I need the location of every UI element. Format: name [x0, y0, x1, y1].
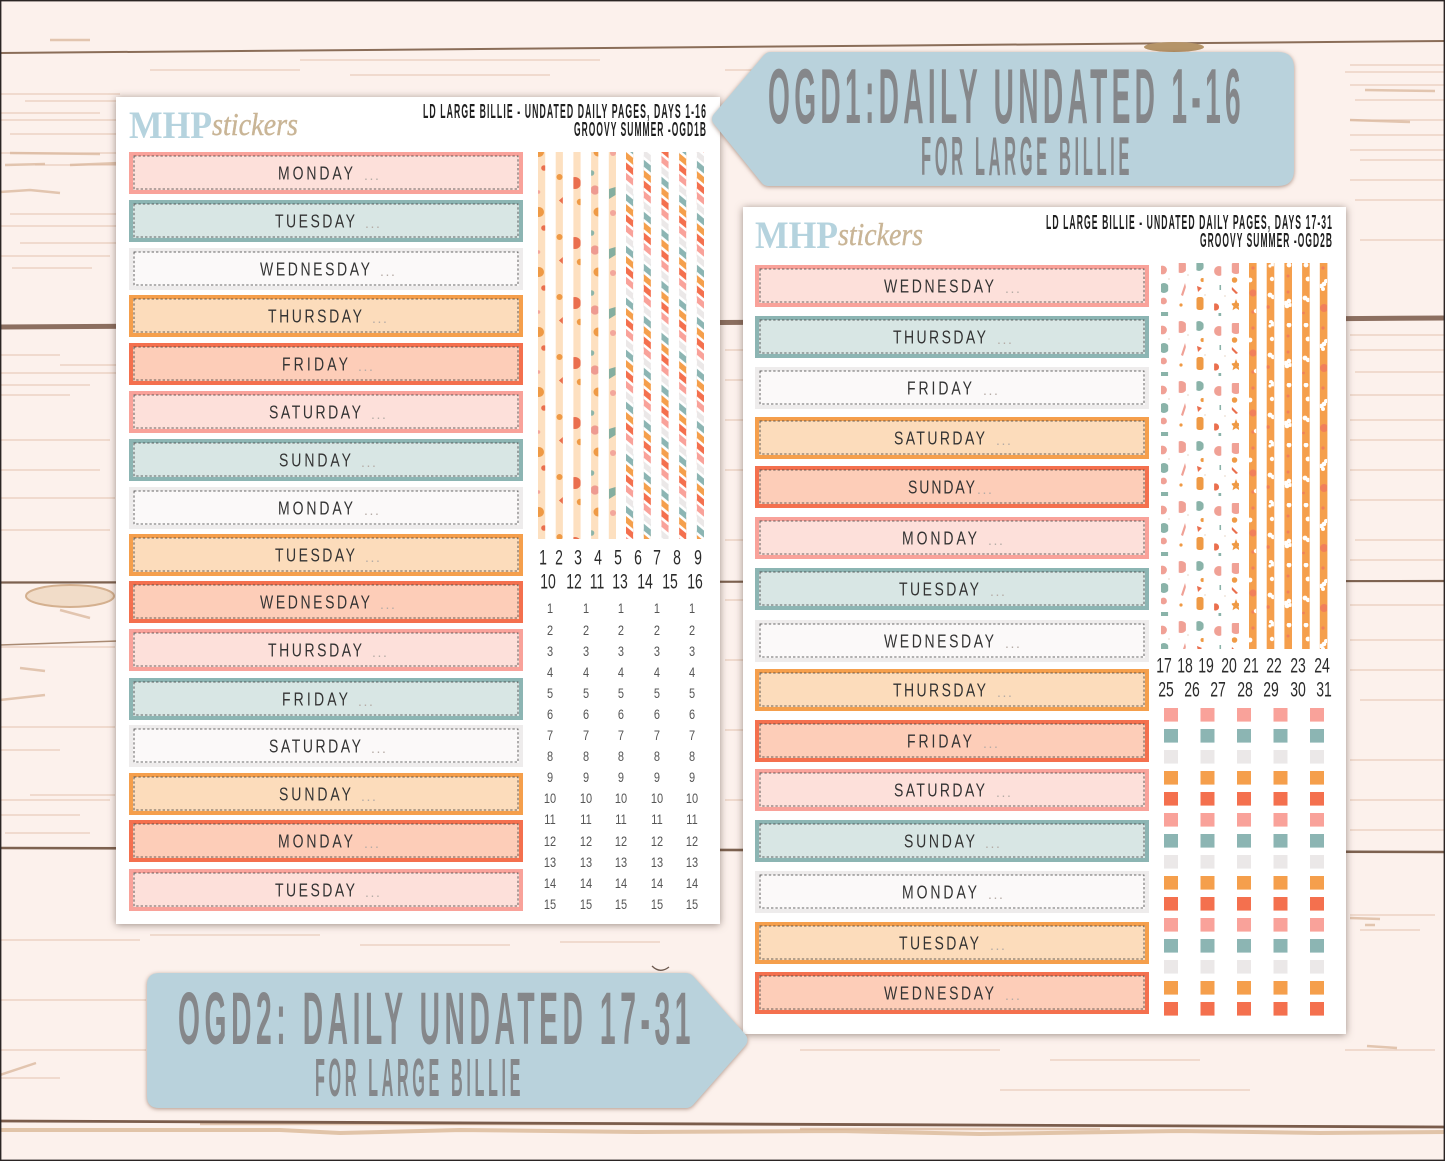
day bar: tuesday [131, 871, 521, 909]
day bar: sunday: SUNDAY [908, 477, 975, 498]
date numbers 17 to 31: 31 [1316, 678, 1332, 701]
date numbers 17 to 31: 27 [1210, 678, 1226, 701]
day bar: friday: ... [983, 382, 999, 398]
small number grid 1 to 15: 10 [686, 791, 698, 806]
logo: MHP stickers [129, 104, 298, 147]
text: LD LARGE BILLIE - UNDATED DAILY PAGES, DAYS 1-16 [423, 101, 707, 123]
date numbers 1 to 16: 9 [694, 546, 702, 569]
day bar: wednesday: ... [1005, 635, 1021, 651]
day bar: tuesday: ... [365, 215, 381, 231]
day bar: sunday: SUNDAY [279, 450, 351, 471]
day bar: sunday [757, 822, 1147, 860]
day bar: sunday: ... [361, 454, 377, 470]
small number grid 1 to 15: 11 [615, 812, 627, 827]
day bar: friday: ... [358, 358, 374, 374]
callout arrow: OGD1 daily undated 1-16 [712, 52, 1294, 187]
day bar: wednesday [757, 622, 1147, 660]
small number grid 1 to 15: 2 [689, 623, 695, 638]
day bar: thursday: ... [372, 310, 388, 326]
logo: MHP stickers: stickers [212, 106, 298, 142]
small number grid 1 to 15: 13 [686, 855, 698, 870]
small number grid 1 to 15: 9 [689, 770, 695, 785]
day bar: sunday: ... [985, 835, 1001, 851]
small number grid 1 to 15: 10 [580, 791, 592, 806]
day bar: wednesday: ... [380, 263, 396, 279]
day bar: sunday [757, 468, 1147, 506]
date numbers 1 to 16: 15 [662, 570, 678, 593]
date numbers 1 to 16: 10 [540, 570, 556, 593]
small number grid 1 to 15: 7 [583, 728, 589, 743]
small number grid 1 to 15: 2 [654, 623, 660, 638]
day bar: monday: ... [364, 167, 380, 183]
small number grid 1 to 15: 8 [654, 749, 660, 764]
logo: MHP stickers [755, 214, 923, 257]
date numbers 1 to 16: 1 [539, 546, 547, 569]
small number grid 1 to 15: 10 [544, 791, 556, 806]
day bar: wednesday: WEDNESDAY [260, 259, 370, 280]
day bar: monday: ... [988, 886, 1004, 902]
small number grid 1 to 15: 1 [618, 601, 624, 616]
small number grid 1 to 15: 15 [544, 897, 556, 912]
day bar: sunday: ... [977, 481, 993, 497]
day bar: wednesday [757, 974, 1147, 1012]
day bar: wednesday: WEDNESDAY [260, 592, 370, 613]
day bar: thursday [757, 318, 1147, 356]
small number grid 1 to 15: 14 [651, 876, 663, 891]
date numbers 17 to 31: 19 [1198, 654, 1214, 677]
day bar: tuesday: ... [365, 549, 381, 565]
day bar: wednesday: WEDNESDAY [884, 983, 994, 1004]
small number grid 1 to 15: 6 [547, 707, 553, 722]
small number grid 1 to 15: 12 [651, 834, 663, 849]
small number grid 1 to 15: 3 [547, 644, 553, 659]
small number grid 1 to 15: 5 [618, 686, 624, 701]
day bar: thursday: THURSDAY [268, 640, 362, 661]
date numbers 17 to 31: 22 [1266, 654, 1282, 677]
small number grid 1 to 15: 8 [547, 749, 553, 764]
small number grid 1 to 15: 3 [654, 644, 660, 659]
small number grid 1 to 15: 15 [686, 897, 698, 912]
day bar: monday: ... [364, 502, 380, 518]
small number grid 1 to 15: 5 [654, 686, 660, 701]
date numbers 17 to 31: 28 [1237, 678, 1253, 701]
day bar: friday: FRIDAY [907, 731, 972, 752]
day bar: saturday [131, 393, 521, 431]
day bar: tuesday [131, 202, 521, 240]
date numbers 1 to 16: 16 [687, 570, 703, 593]
small number grid 1 to 15: 12 [580, 834, 592, 849]
small number grid 1 to 15: 3 [583, 644, 589, 659]
small number grid 1 to 15: 5 [689, 686, 695, 701]
small number grid 1 to 15: 8 [618, 749, 624, 764]
day bar: thursday: THURSDAY [893, 327, 986, 348]
small number grid 1 to 15: 9 [654, 770, 660, 785]
day bar: monday [131, 154, 521, 192]
small number grid 1 to 15: 3 [618, 644, 624, 659]
day bar: saturday: SATURDAY [894, 780, 985, 801]
day bar: tuesday [131, 536, 521, 574]
small number grid 1 to 15: 2 [583, 623, 589, 638]
header text [1046, 212, 1333, 252]
small number grid 1 to 15: 7 [618, 728, 624, 743]
small number grid 1 to 15: 5 [583, 686, 589, 701]
day bar: monday: MONDAY [902, 528, 977, 549]
small number grid 1 to 15: 4 [583, 665, 589, 680]
date numbers 17 to 31: 26 [1184, 678, 1200, 701]
small number grid 1 to 15: 6 [618, 707, 624, 722]
day bar: sunday [131, 775, 521, 813]
small number grid 1 to 15: 6 [654, 707, 660, 722]
date numbers 1 to 16: 5 [614, 546, 622, 569]
date numbers 17 to 31: 25 [1158, 678, 1174, 701]
day bar: sunday: SUNDAY [904, 831, 975, 852]
day bar: friday: ... [358, 693, 374, 709]
header text [423, 101, 707, 141]
day bar: tuesday: ... [990, 937, 1006, 953]
day bar: monday [131, 489, 521, 527]
day bar: wednesday [131, 583, 521, 621]
date numbers 1 to 16: 2 [555, 546, 563, 569]
washi strips: shapes on white [1161, 263, 1240, 649]
small number grid 1 to 15: 8 [583, 749, 589, 764]
day bar: saturday: SATURDAY [894, 428, 985, 449]
day bar: tuesday: ... [365, 884, 381, 900]
day bar: wednesday: ... [1005, 987, 1021, 1003]
small number grid 1 to 15: 11 [651, 812, 663, 827]
date numbers 17 to 31: 18 [1177, 654, 1193, 677]
small number grid 1 to 15: 1 [583, 601, 589, 616]
day bar: friday: FRIDAY [282, 354, 348, 375]
small number grid 1 to 15: 10 [651, 791, 663, 806]
small number grid 1 to 15: 13 [615, 855, 627, 870]
day bar: tuesday: TUESDAY [899, 579, 979, 600]
day bar: thursday: ... [372, 644, 388, 660]
small number grid 1 to 15: 1 [689, 601, 695, 616]
day bar: thursday: ... [997, 684, 1013, 700]
date numbers 1 to 16: 8 [673, 546, 681, 569]
washi strips: terrazzo [538, 152, 616, 539]
small number grid 1 to 15: 8 [689, 749, 695, 764]
day bar: friday: FRIDAY [282, 689, 348, 710]
small number grid 1 to 15: 14 [544, 876, 556, 891]
small number grid 1 to 15: 11 [544, 812, 556, 827]
day bar: wednesday: WEDNESDAY [884, 276, 994, 297]
small number grid 1 to 15: 9 [547, 770, 553, 785]
date numbers 17 to 31: 29 [1263, 678, 1279, 701]
day bar: saturday: ... [371, 740, 387, 756]
day bar: monday: MONDAY [278, 163, 353, 184]
day bar: friday [131, 680, 521, 718]
date numbers 17 to 31: 17 [1156, 654, 1172, 677]
sticker sheet 1 [116, 97, 720, 924]
day bar: saturday [757, 419, 1147, 457]
washi strips: candy stripes [626, 152, 704, 539]
day bar: saturday: ... [996, 432, 1012, 448]
date numbers 1 to 16: 4 [594, 546, 602, 569]
logo: MHP stickers: stickers [838, 216, 923, 252]
small number grid 1 to 15: 15 [615, 897, 627, 912]
day bar: saturday: ... [371, 406, 387, 422]
logo: MHP stickers: MHP [755, 214, 838, 257]
day bar: tuesday [757, 570, 1147, 608]
date numbers 1 to 16: 3 [574, 546, 582, 569]
small number grid 1 to 15: 11 [686, 812, 698, 827]
small number grid 1 to 15: 4 [547, 665, 553, 680]
small number grid 1 to 15: 2 [547, 623, 553, 638]
small number grid 1 to 15: 2 [618, 623, 624, 638]
small number grid 1 to 15: 6 [583, 707, 589, 722]
date numbers 1 to 16: 14 [637, 570, 653, 593]
date numbers 1 to 16 [539, 546, 703, 593]
day bar: sunday: ... [361, 788, 377, 804]
day bar: thursday [131, 631, 521, 669]
washi strips: orange floral [1249, 263, 1328, 649]
small number grid 1 to 15: 14 [615, 876, 627, 891]
day bar: friday [757, 722, 1147, 760]
day bar: saturday: ... [996, 784, 1012, 800]
day bar: thursday [131, 297, 521, 335]
small number grid 1 to 15: 9 [583, 770, 589, 785]
small number grid 1 to 15: 11 [580, 812, 592, 827]
day bar: thursday: ... [997, 331, 1013, 347]
day bar: tuesday [757, 924, 1147, 962]
day bar: friday: FRIDAY [907, 378, 972, 399]
day bar: tuesday: ... [990, 583, 1006, 599]
day bar: friday [131, 345, 521, 383]
day bar: monday: MONDAY [278, 831, 353, 852]
day bar: wednesday [757, 267, 1147, 305]
day bar: tuesday: TUESDAY [275, 880, 355, 901]
day bar: friday [757, 369, 1147, 407]
date numbers 17 to 31 [1156, 654, 1332, 701]
date numbers 1 to 16: 6 [634, 546, 642, 569]
callout arrow: OGD2 daily undated 17-31: FOR LARGE BILLIE [315, 1048, 524, 1108]
day bar: tuesday: TUESDAY [275, 545, 355, 566]
date numbers 1 to 16: 7 [653, 546, 661, 569]
day bar: friday: ... [983, 735, 999, 751]
small number grid 1 to 15: 12 [615, 834, 627, 849]
date numbers 1 to 16: 12 [566, 570, 582, 593]
day bar: wednesday: ... [1005, 280, 1021, 296]
day bar: thursday [757, 671, 1147, 709]
day bar: monday: MONDAY [278, 498, 353, 519]
day bar: monday [757, 873, 1147, 911]
date numbers 17 to 31: 24 [1314, 654, 1330, 677]
day bar: monday [131, 822, 521, 860]
date numbers 17 to 31: 23 [1290, 654, 1306, 677]
small number grid 1 to 15: 13 [544, 855, 556, 870]
day bar: monday: ... [988, 532, 1004, 548]
day bar: monday [757, 519, 1147, 557]
day bar: wednesday: ... [380, 596, 396, 612]
small number grid 1 to 15: 14 [686, 876, 698, 891]
logo: MHP stickers: MHP [129, 104, 212, 147]
small number grid 1 to 15: 12 [686, 834, 698, 849]
small number grid 1 to 15: 1 [547, 601, 553, 616]
day bar: thursday: THURSDAY [268, 306, 362, 327]
date numbers 1 to 16: 11 [590, 570, 604, 593]
small number grid 1 to 15: 1 [654, 601, 660, 616]
small number grid 1 to 15: 4 [689, 665, 695, 680]
small number grid 1 to 15: 7 [547, 728, 553, 743]
small number grid 1 to 15: 14 [580, 876, 592, 891]
day bar: monday: ... [364, 835, 380, 851]
small number grid 1 to 15: 5 [547, 686, 553, 701]
day bar: thursday: THURSDAY [893, 680, 986, 701]
day bar: saturday [131, 727, 521, 765]
small number grid 1 to 15: 6 [689, 707, 695, 722]
date numbers 17 to 31: 21 [1243, 654, 1259, 677]
day bar: monday: MONDAY [902, 882, 977, 903]
small number grid 1 to 15: 4 [654, 665, 660, 680]
day bar: tuesday: TUESDAY [275, 211, 355, 232]
sticker sheet 2 [743, 207, 1346, 1034]
day bar: saturday: SATURDAY [269, 402, 361, 423]
day bar: sunday: SUNDAY [279, 784, 351, 805]
day bar: saturday [757, 771, 1147, 809]
day bar: wednesday: WEDNESDAY [884, 631, 994, 652]
small number grid 1 to 15: 7 [654, 728, 660, 743]
small number grid 1 to 15: 3 [689, 644, 695, 659]
coloured square grid [1164, 708, 1324, 1016]
small number grid 1 to 15: 15 [651, 897, 663, 912]
small number grid 1 to 15: 13 [580, 855, 592, 870]
date numbers 17 to 31: 30 [1290, 678, 1306, 701]
date numbers 17 to 31: 20 [1221, 654, 1237, 677]
day bar: wednesday [131, 250, 521, 288]
day bar: tuesday: TUESDAY [899, 933, 979, 954]
day bar: saturday: SATURDAY [269, 736, 361, 757]
small number grid 1 to 15: 9 [618, 770, 624, 785]
day bar: sunday [131, 441, 521, 479]
date numbers 1 to 16: 13 [612, 570, 628, 593]
small number grid 1 to 15: 13 [651, 855, 663, 870]
callout arrow: OGD2 daily undated 17-31 [147, 973, 748, 1108]
small number grid 1 to 15: 15 [580, 897, 592, 912]
small number grid 1 to 15: 4 [618, 665, 624, 680]
small number grid 1 to 15 [544, 601, 698, 912]
small number grid 1 to 15: 12 [544, 834, 556, 849]
small number grid 1 to 15: 7 [689, 728, 695, 743]
text: GROOVY SUMMER -OGD1B [574, 119, 707, 141]
small number grid 1 to 15: 10 [615, 791, 627, 806]
